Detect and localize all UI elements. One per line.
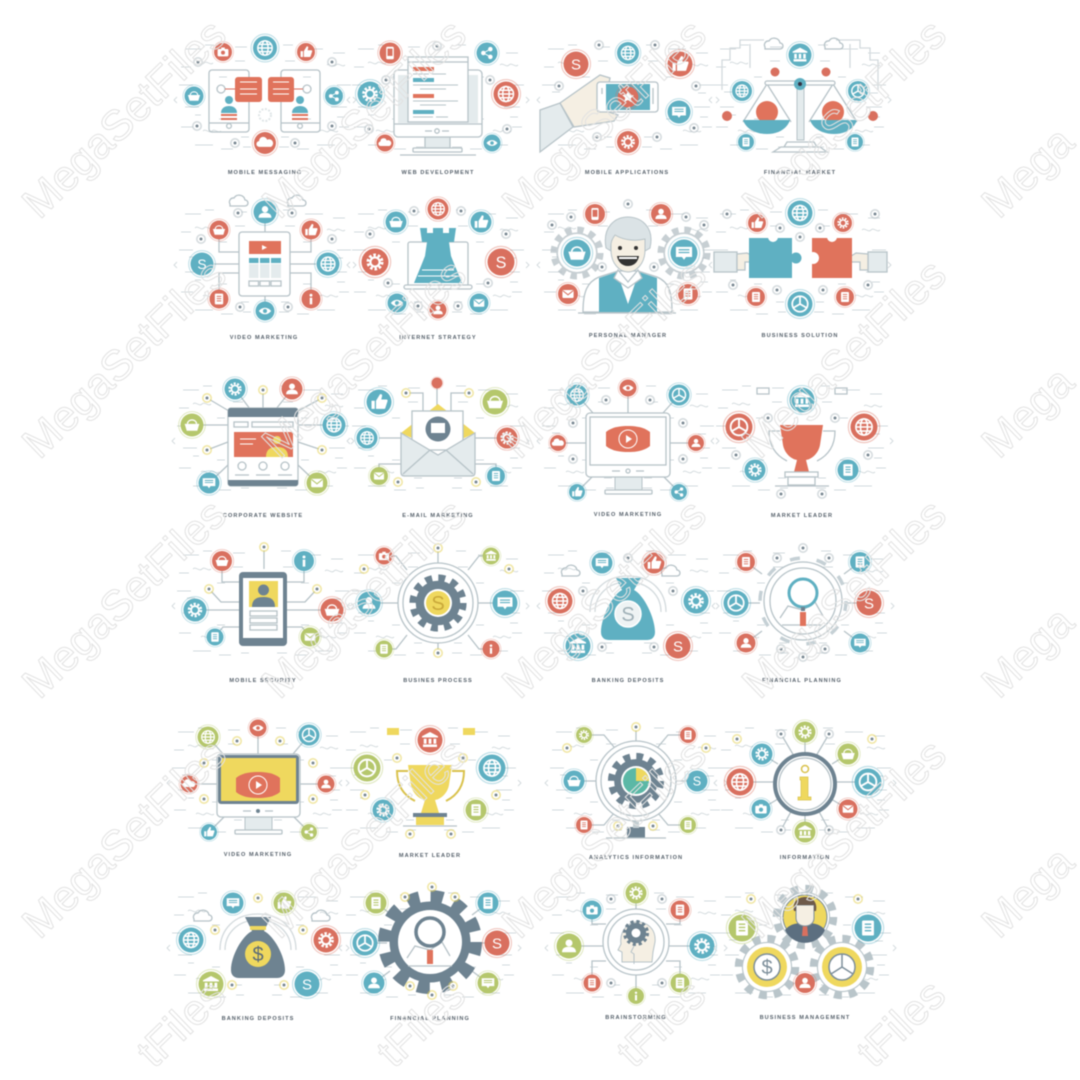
icon: gear badge	[833, 213, 853, 233]
panel: corporate website	[172, 377, 354, 519]
panel: mobile applications	[537, 40, 719, 176]
panel: financial planning (teal)	[712, 543, 894, 684]
illustration: monitor with code page	[394, 57, 482, 155]
illustration: gray money bag: $	[252, 944, 264, 966]
icon: user badge	[316, 774, 336, 794]
icon: chat badge	[666, 99, 692, 125]
yellow node markers	[202, 385, 327, 455]
icon: chat badge	[668, 237, 700, 269]
icon: document badge	[726, 912, 758, 944]
label: INFORMATION	[780, 855, 830, 861]
icon: mail badge	[837, 798, 859, 820]
panel: e-mail marketing	[347, 377, 529, 519]
icon: S badge	[562, 50, 590, 78]
icon: gear badge	[575, 726, 593, 744]
watermark text grid: MegaSetFiles	[13, 730, 236, 948]
yellow node markers	[359, 543, 514, 658]
label: MOBILE MESSAGING	[228, 170, 302, 176]
panel: market leader (red trophy)	[711, 386, 893, 519]
icon: document badge	[476, 891, 500, 915]
panel: video marketing (monitor)	[537, 378, 719, 518]
icon: chat badge	[476, 971, 500, 995]
yellow node markers	[732, 734, 877, 744]
icon: S badge	[854, 588, 884, 618]
illustration: hand holding phone	[540, 75, 658, 152]
icon: gear badge	[750, 742, 774, 766]
yellow node markers	[210, 893, 308, 990]
small dot markers	[731, 413, 873, 499]
icon: gear badge	[359, 246, 391, 278]
icon: gear badge	[615, 129, 641, 155]
icon: thumbs-up badge	[469, 210, 493, 234]
icon: wheel badge	[723, 411, 755, 443]
icon: camera badge	[213, 42, 233, 62]
icon: globe badge	[355, 426, 379, 450]
yellow node markers	[199, 736, 318, 804]
icon: basket badge	[319, 597, 345, 623]
icon: bank badge	[793, 820, 817, 844]
icon: document badge	[208, 288, 230, 310]
icon: user badge	[649, 202, 673, 226]
icon: wheel badge	[667, 383, 691, 407]
panel: brainstorming	[545, 881, 727, 1021]
icon: thumbs-up badge	[747, 213, 767, 233]
illustration: gear with dollar in rings: S	[431, 593, 445, 615]
icon: bank badge	[788, 386, 816, 414]
panel: internet strategy	[347, 197, 529, 341]
yellow node markers	[562, 722, 711, 831]
small red markers	[722, 68, 878, 121]
label: VIDEO MARKETING	[230, 335, 298, 341]
icon: cloud badge	[179, 774, 199, 794]
small dot markers	[196, 208, 337, 312]
icon: user badge	[735, 632, 757, 654]
icon: user badge	[280, 377, 304, 401]
icon: thumbs-up badge	[364, 388, 394, 416]
panel: banking deposits (teal)	[537, 551, 719, 684]
icon: eye badge	[618, 378, 638, 398]
icon: document badge	[669, 972, 691, 994]
icon: cloud badge	[549, 434, 567, 452]
illustration: two phones with chat bubbles	[209, 70, 320, 132]
icon: S badge: S	[496, 254, 507, 272]
label: BUSINESS SOLUTION	[762, 333, 838, 339]
illustration: three gears with manager portrait: $	[761, 957, 773, 979]
panel: mobile security	[172, 542, 354, 684]
icon: wheel badge	[297, 723, 321, 747]
icon: eye badge	[386, 292, 408, 314]
label: MOBILE APPLICATIONS	[585, 170, 669, 176]
icon: chat badge	[849, 632, 871, 654]
small dot markers	[606, 894, 667, 988]
icon: mail badge	[305, 471, 329, 495]
icon: document badge	[848, 550, 872, 574]
label: FINANCIAL PLANNING	[762, 678, 842, 684]
icon: camera badge	[374, 546, 394, 566]
icon: bank badge	[416, 726, 444, 754]
icon: info badge	[627, 987, 645, 1005]
illustration: laptop with chess rook	[404, 228, 472, 289]
icon: gear badge	[624, 881, 648, 905]
label: FINANCIAL MARKET	[764, 170, 836, 176]
icon: gear badge	[743, 458, 767, 482]
small dot markers	[578, 553, 678, 652]
watermark text grid: MegaSetFiles	[733, 730, 956, 948]
icon: cloud badge	[252, 130, 278, 156]
icon: bank badge	[787, 42, 813, 68]
icon: thumbs-up badge	[296, 42, 316, 62]
watermark text grid: MegaSetFiles	[253, 490, 476, 708]
icon: document badge	[464, 798, 488, 822]
icon: basket badge	[183, 85, 205, 107]
icon: thumbs-up badge	[300, 219, 322, 241]
watermark text grid: MegaSetFiles	[13, 490, 236, 708]
label: PERSONAL MANAGER	[589, 333, 667, 339]
icon: gear badge	[356, 80, 384, 108]
icon: document badge	[737, 133, 755, 151]
small dot markers	[772, 543, 834, 662]
icon: chat badge	[221, 891, 245, 915]
illustration: phone with user profile	[195, 547, 332, 646]
icon: gear badge	[793, 720, 817, 744]
icon: globe badge	[426, 197, 450, 221]
icon: gear badge	[223, 377, 247, 401]
panel: analytics information	[545, 722, 727, 861]
label: CORPORATE WEBSITE	[223, 513, 303, 519]
icon: share badge	[324, 86, 344, 106]
icon: globe badge	[251, 34, 279, 62]
panel: web development	[347, 41, 529, 176]
icon: globe badge	[321, 412, 347, 438]
illustration: gray money bag	[193, 910, 330, 978]
icon: gear badge	[688, 932, 716, 960]
icon: basket badge	[384, 210, 408, 234]
icon: mail badge	[556, 282, 580, 306]
icon: S badge	[189, 251, 215, 277]
icon: S badge: S	[864, 596, 874, 613]
icon: camera badge	[581, 899, 603, 921]
icon: S badge: S	[673, 638, 683, 656]
icon: user badge	[428, 300, 448, 320]
label: MOBILE SECURITY	[229, 678, 297, 684]
watermark text grid: MegaSetFiles	[493, 250, 716, 468]
watermark text grid: tFiles	[848, 971, 955, 1077]
icon: bank badge	[564, 632, 592, 660]
illustration: tablet with video and connectors	[214, 195, 316, 311]
icon: globe badge	[546, 586, 574, 616]
icon: basket badge	[208, 219, 230, 241]
panel: video marketing (yellow)	[167, 718, 349, 858]
illustration: three gears with manager portrait	[739, 889, 870, 995]
watermark text grid: MegaSetFiles	[493, 730, 716, 948]
icon: wheel badge	[722, 588, 750, 618]
label: BUSINESS MANAGEMENT	[760, 1015, 850, 1021]
illustration: red trophy	[757, 388, 847, 486]
icon: document badge	[364, 891, 388, 915]
icon: globe badge	[476, 752, 508, 784]
icon: wheel badge	[350, 928, 380, 958]
label: BANKING DEPOSITS	[592, 678, 664, 684]
small dot markers	[364, 41, 512, 134]
illustration: magnifier with gear and pie chart	[574, 727, 697, 838]
illustration: hands joining puzzle pieces	[714, 232, 887, 278]
icon: S badge	[685, 769, 709, 793]
icon: thumbs-up badge	[666, 50, 694, 78]
panel: financial market	[709, 38, 891, 176]
icon: document badge	[835, 287, 855, 307]
icon: document badge	[836, 458, 860, 482]
icon: eye badge	[248, 718, 268, 738]
icon: wheel badge	[846, 79, 870, 103]
icon: mail badge	[299, 626, 321, 648]
icon: share badge	[300, 823, 318, 841]
label: INTERNET STRATEGY	[399, 335, 477, 341]
icon: thumbs-up badge	[568, 483, 586, 501]
illustration: outlined gear with magnifier	[736, 558, 869, 644]
panel: busines process	[347, 543, 529, 684]
icon: basket badge	[179, 412, 205, 438]
icon: globe badge	[615, 40, 641, 66]
icon: globe badge	[315, 251, 341, 277]
icon: gear badge	[312, 926, 340, 954]
icon: basket badge	[561, 237, 593, 269]
icon: bank badge	[481, 546, 501, 566]
watermark text grid: MegaSetFiles	[733, 490, 956, 708]
watermark text grid: MegaSetFiles	[493, 490, 716, 708]
watermark text grid: MegaSetFiles	[733, 250, 956, 468]
panel: market leader (gold)	[339, 726, 521, 859]
icon: wheel badge	[351, 752, 383, 784]
panel: information	[714, 720, 896, 861]
label: BUSINES PROCESS	[403, 678, 473, 684]
icon: chart badge	[676, 282, 700, 306]
label: MARKET LEADER	[399, 853, 461, 859]
icon: wheel badge	[852, 766, 884, 798]
icon: eye badge	[254, 300, 276, 322]
illustration: ring with letter i	[740, 732, 868, 832]
icon: S badge: S	[693, 775, 701, 789]
icon: user badge	[793, 971, 817, 995]
icon: thumbs-up badge	[272, 891, 296, 915]
watermark text grid: MegaSetFiles	[733, 10, 956, 228]
watermark text grid: MegaSetFiles	[13, 10, 236, 228]
label: MARKET LEADER	[771, 513, 833, 519]
small dot markers	[192, 57, 337, 148]
icon: user badge	[687, 434, 705, 452]
illustration: monitor with yellow screen	[189, 728, 326, 834]
icon: document badge	[746, 287, 766, 307]
watermark text grid: tFiles	[128, 971, 235, 1077]
icon: document badge	[374, 639, 394, 659]
illustration: ring with head and gear	[569, 893, 702, 996]
watermark text grid: tFiles	[608, 971, 715, 1077]
label: BRAINSTORMING	[605, 1015, 667, 1021]
illustration: browser window with connectors	[192, 389, 334, 486]
icon: info badge	[300, 288, 322, 310]
icon: document badge	[736, 552, 756, 572]
icon: user badge	[252, 199, 278, 225]
icon: globe badge	[848, 411, 880, 443]
label: ANALYTICS INFORMATION	[589, 855, 683, 861]
icon: bank badge	[196, 970, 226, 998]
icon: globe badge	[176, 926, 206, 954]
icon: telephone badge	[583, 202, 607, 226]
icon: S badge: S	[571, 56, 581, 74]
icon: globe badge	[196, 725, 220, 749]
icon: globe badge	[565, 383, 589, 407]
illustration: balance scale with coins	[722, 38, 878, 152]
watermark text grid: MegaSetFiles	[253, 10, 476, 228]
icon: S badge	[482, 928, 512, 958]
watermark text grid: MegaSetFiles	[253, 730, 476, 948]
label: WEB DEVELOPMENT	[402, 170, 474, 176]
icon: globe badge	[786, 198, 814, 228]
icon: document badge	[846, 133, 864, 151]
small dot markers	[722, 209, 880, 295]
small dot markers	[365, 206, 511, 311]
icon: thumbs-up badge	[200, 823, 218, 841]
watermark text grid: tFiles	[368, 971, 475, 1077]
icon: document badge	[679, 816, 697, 834]
icon: gear badge	[182, 597, 208, 623]
panel: banking deposits (gray)	[167, 891, 349, 1022]
icon: star badge	[616, 85, 640, 109]
yellow node markers	[400, 882, 460, 1000]
icon: S badge: S	[197, 257, 207, 272]
small dot markers	[547, 199, 709, 272]
icon: chat badge	[590, 551, 614, 575]
icon: gear badge	[682, 586, 710, 616]
icon: share badge	[475, 41, 499, 65]
icon: S badge	[485, 246, 517, 278]
icon: S badge	[292, 970, 322, 998]
illustration: open envelope with letter	[379, 383, 507, 476]
icon: gear badge	[495, 426, 519, 450]
icon: basket badge	[480, 388, 510, 416]
panel: business solution	[709, 198, 891, 339]
icon: globe badge	[492, 80, 520, 108]
label: VIDEO MARKETING	[594, 512, 662, 518]
icon: chat badge	[490, 588, 520, 618]
icon: info badge	[481, 639, 501, 659]
icon: wheel badge	[786, 290, 814, 318]
panel: video marketing (tablet)	[174, 195, 356, 341]
icon: user badge	[356, 590, 382, 616]
icon: share badge	[670, 483, 688, 501]
label: FINANCIAL PLANNING	[390, 1016, 470, 1022]
illustration: teal money bag: S	[621, 604, 635, 626]
icon: basket badge	[562, 769, 586, 793]
yellow node markers	[360, 753, 501, 839]
watermark text grid: MegaSetFiles	[253, 250, 476, 468]
illustration: gold trophy	[387, 728, 475, 826]
label: VIDEO MARKETING	[224, 852, 292, 858]
icon: red node	[431, 377, 443, 389]
small dot markers	[554, 40, 701, 142]
icon: eye badge	[482, 133, 502, 153]
icon: document badge	[575, 816, 593, 834]
illustration: teal money bag	[561, 565, 680, 640]
icon: thumbs-up badge	[642, 551, 666, 575]
yellow node markers	[204, 542, 322, 594]
icon: mail badge	[468, 292, 490, 314]
icon: chat badge	[197, 471, 221, 495]
icon: document badge	[852, 912, 884, 944]
icon: user badge	[554, 932, 584, 960]
illustration: smiling manager with gears	[554, 217, 707, 313]
panel: business management	[714, 889, 896, 1021]
icon: globe badge	[724, 766, 756, 798]
illustration: dark gear with magnifier	[365, 896, 497, 988]
icon: document badge	[679, 726, 697, 744]
icon: camera badge	[750, 798, 772, 820]
icon: document badge	[582, 973, 602, 993]
icon: basket badge	[836, 742, 860, 766]
yellow node markers	[393, 388, 481, 487]
illustration: gear with dollar in rings	[369, 548, 505, 653]
icon: mail badge	[369, 466, 389, 486]
icon: document badge	[205, 627, 225, 647]
icon: S badge: S	[302, 976, 312, 994]
small dot markers	[568, 395, 688, 464]
panel: financial planning (dark gear)	[339, 882, 521, 1022]
panel: personal manager	[537, 199, 719, 339]
panel: mobile messaging	[174, 34, 356, 176]
icon: globe badge	[730, 79, 754, 103]
icon: S badge: S	[492, 936, 502, 953]
icon: document badge	[486, 466, 506, 486]
icon: gear badge	[371, 798, 395, 822]
small dot markers	[776, 729, 834, 835]
yellow node markers	[746, 894, 863, 904]
watermark text grid: MegaSetFiles	[13, 250, 236, 468]
label: E-MAIL MARKETING	[402, 513, 474, 519]
icon: cloud badge	[375, 133, 395, 153]
label: BANKING DEPOSITS	[222, 1016, 294, 1022]
icon: S badge	[664, 632, 692, 660]
icon: user badge	[362, 971, 386, 995]
watermark text grid: MegaSetFiles	[493, 10, 716, 228]
illustration: monitor with play eye	[558, 388, 696, 494]
icon: info badge	[292, 549, 316, 573]
icon: basket badge	[210, 549, 234, 573]
icon: document badge	[669, 899, 691, 921]
icon: phone badge	[378, 41, 402, 65]
